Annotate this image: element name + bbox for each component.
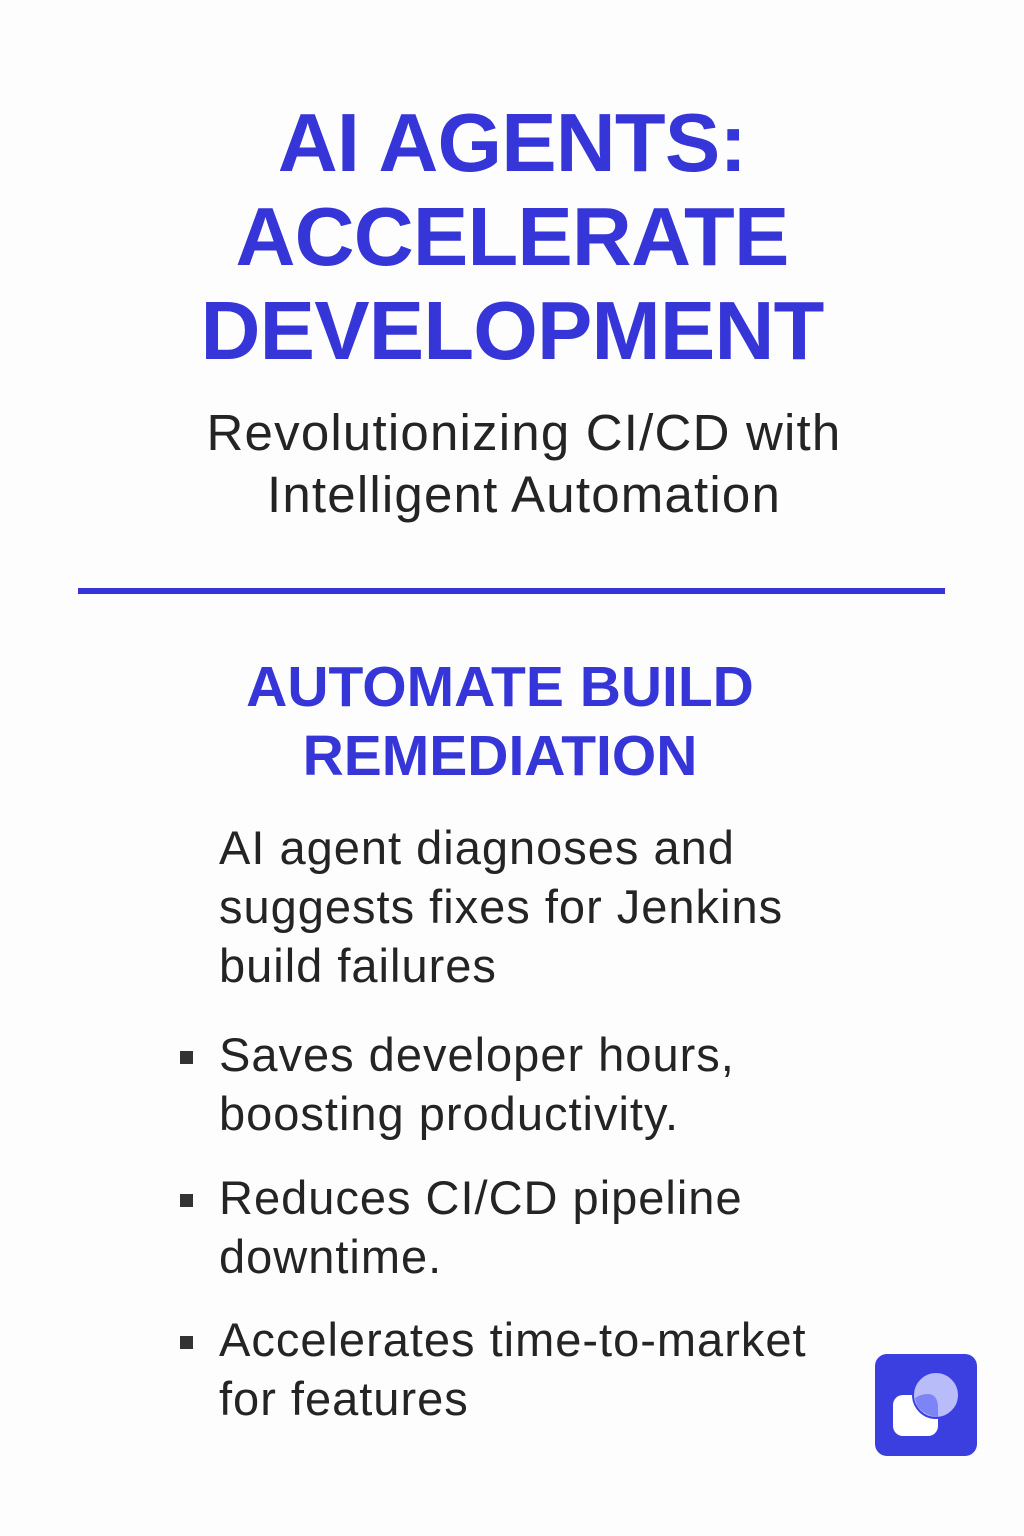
description text: AI agent diagnoses and bbox=[219, 821, 735, 874]
description text: build failures bbox=[219, 939, 497, 992]
subtitle bbox=[207, 404, 841, 523]
section heading bbox=[246, 655, 754, 788]
bullet 2 bbox=[180, 1171, 743, 1283]
bullet list: boosting productivity. bbox=[219, 1087, 679, 1140]
bullet 3 bbox=[180, 1313, 807, 1425]
section heading: REMEDIATION bbox=[303, 724, 697, 788]
title: AI AGENTS: bbox=[278, 96, 746, 189]
bullet list bbox=[180, 1028, 807, 1425]
title: DEVELOPMENT bbox=[200, 284, 823, 377]
title: ACCELERATE bbox=[235, 190, 789, 283]
section heading: AUTOMATE BUILD bbox=[246, 655, 754, 719]
description text bbox=[219, 821, 783, 992]
icon: logo bbox=[875, 1354, 977, 1456]
subtitle: Intelligent Automation bbox=[267, 466, 781, 523]
bullet list: downtime. bbox=[219, 1230, 442, 1283]
bullet list: for features bbox=[219, 1372, 469, 1425]
title bbox=[200, 96, 824, 377]
bullet list: Accelerates time-to-market bbox=[219, 1313, 807, 1366]
subtitle: Revolutionizing CI/CD with bbox=[207, 404, 841, 461]
bullet 1 bbox=[180, 1028, 735, 1140]
description text: suggests fixes for Jenkins bbox=[219, 880, 783, 933]
bullet list: Saves developer hours, bbox=[219, 1028, 735, 1081]
bullet list: Reduces CI/CD pipeline bbox=[219, 1171, 743, 1224]
